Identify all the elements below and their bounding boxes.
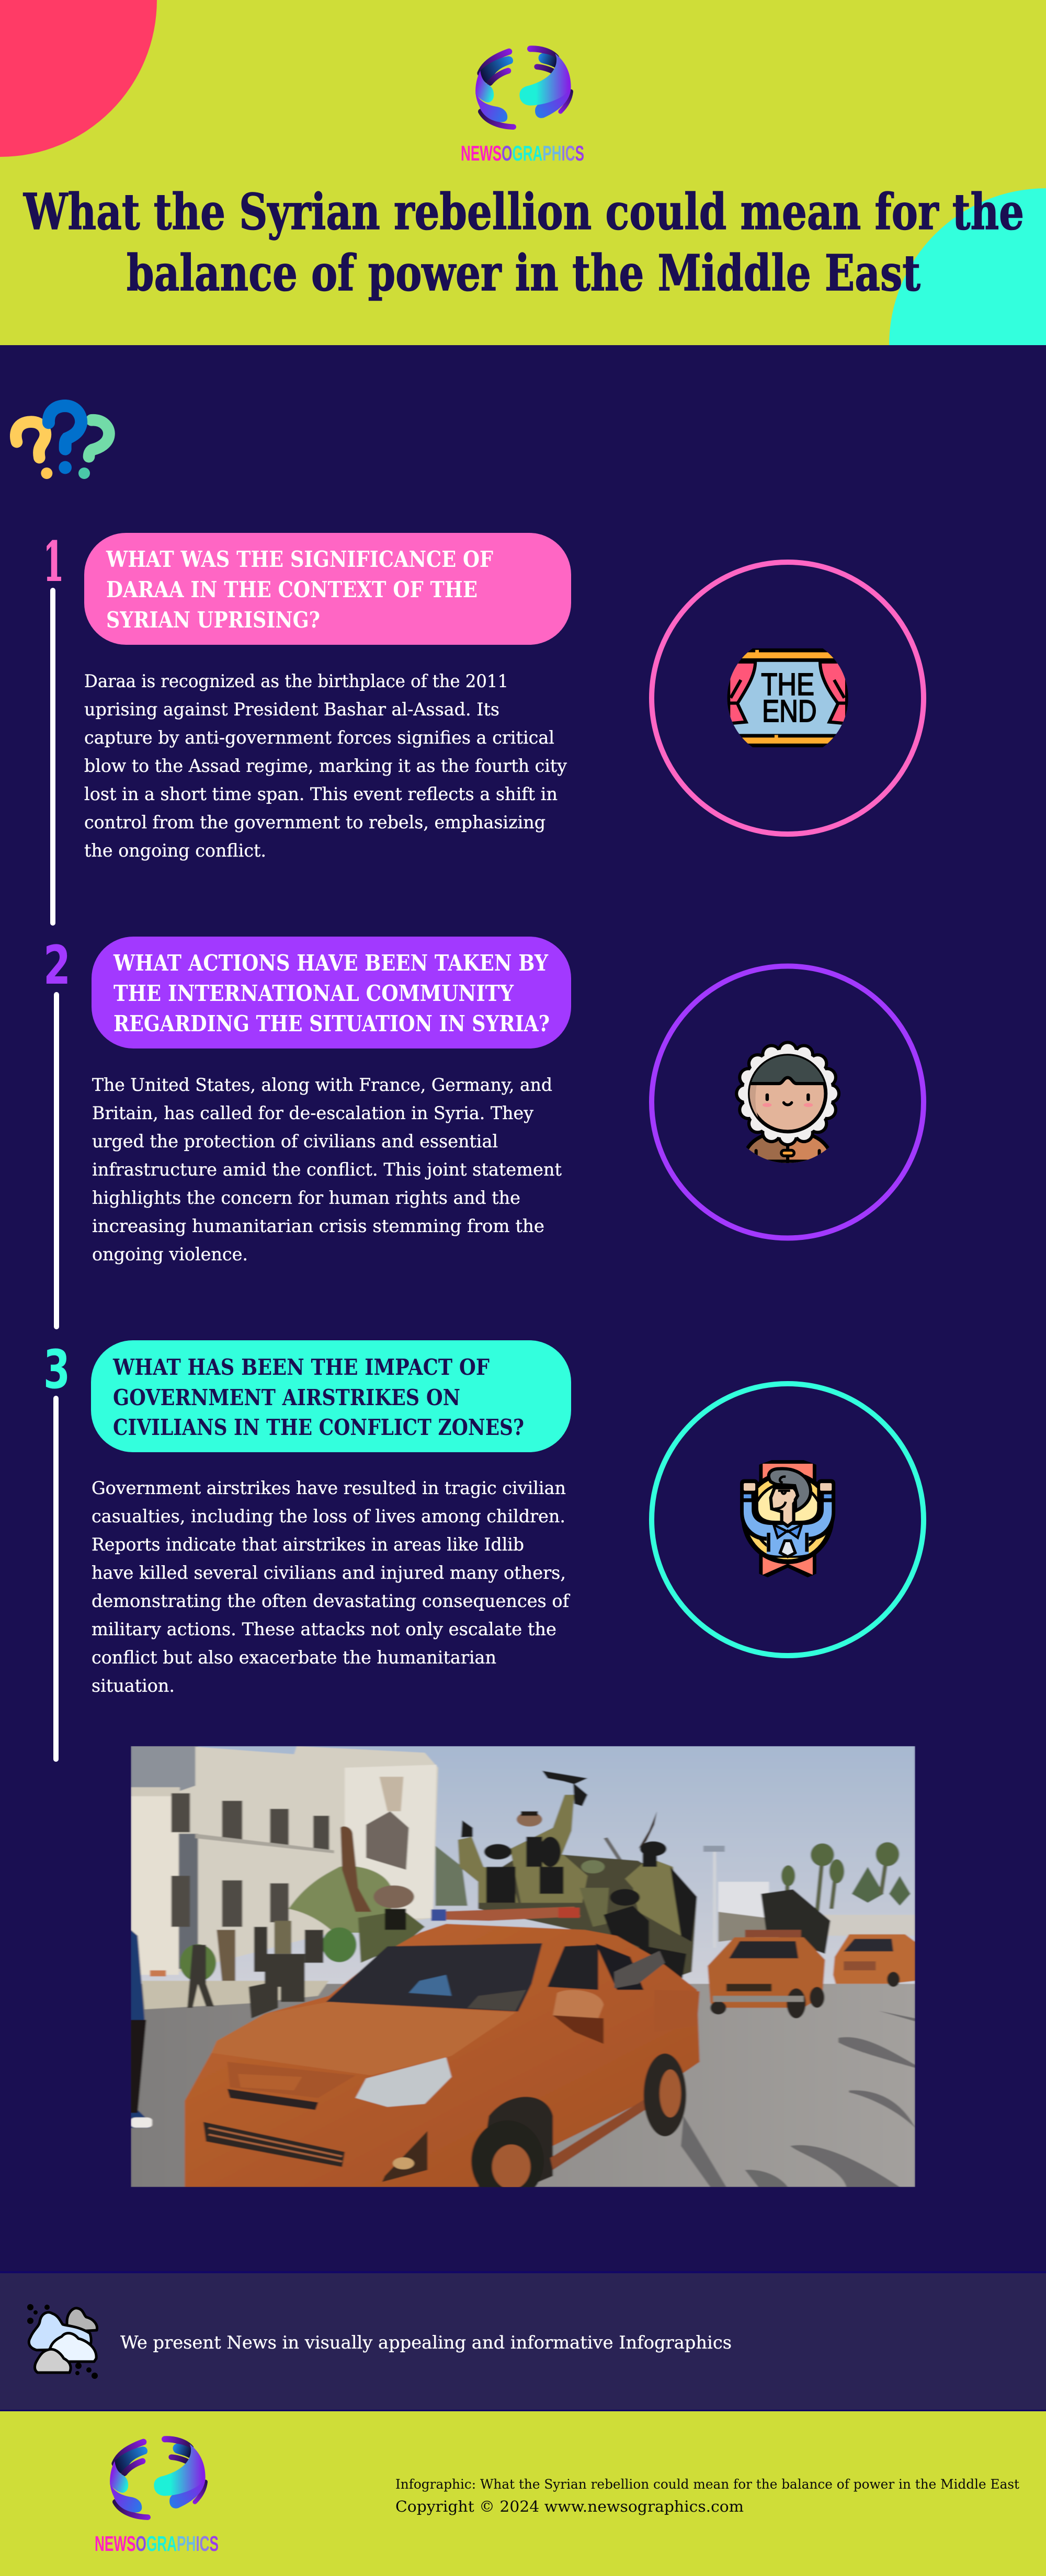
- question pill 3: [91, 1340, 571, 1452]
- answer text 1: [84, 671, 567, 861]
- question pill 3: CIVILIANS IN THE CONFLICT ZONES?: [113, 1415, 524, 1440]
- answer text 1: control from the government to rebels, emphasizing: [84, 812, 545, 833]
- light bar: [431, 1907, 581, 1921]
- section 3: [43, 1339, 924, 1762]
- timeline line 2: [54, 992, 59, 1329]
- icon ring 1: [652, 562, 924, 834]
- logo: Newsographics header: [461, 49, 584, 165]
- header band: [0, 0, 1046, 345]
- answer text 3: conflict but also exacerbate the humanitarian: [92, 1647, 496, 1668]
- answer text 3: Government airstrikes have resulted in tragic civilian: [92, 1478, 566, 1498]
- photo: rebel fighters on rust-coloured pickup trucks: [131, 1746, 915, 2202]
- answer text 3: have killed several civilians and injured many others,: [92, 1563, 566, 1583]
- answer text 2: increasing humanitarian crisis stemming from the: [92, 1216, 544, 1236]
- question pill 1: WHAT WAS THE SIGNIFICANCE OF: [106, 546, 493, 572]
- main pickup truck: [185, 1924, 700, 2202]
- answer text 1: lost in a short time span. This event reflects a shift in: [84, 784, 558, 804]
- building: [131, 1746, 199, 1791]
- footer logo: [95, 2439, 219, 2556]
- answer text 3: Reports indicate that airstrikes in areas like Idlib: [92, 1534, 524, 1555]
- answer text 1: blow to the Assad regime, marking it as the fourth city: [84, 756, 567, 776]
- number 3: 3: [43, 1339, 70, 1401]
- answer text 2: ongoing violence.: [92, 1244, 248, 1264]
- section 2: [43, 934, 924, 1329]
- icon: man with ribbon badge: [740, 1460, 835, 1577]
- number 2: 2: [43, 934, 71, 997]
- icon: person in fur hood: [735, 1041, 840, 1167]
- tagline text: We present News in visually appealing and informative Infographics: [120, 2332, 732, 2353]
- icon: question marks: [16, 406, 109, 479]
- palm and hedges: [289, 1866, 393, 1933]
- icon: clouds: [27, 2304, 98, 2379]
- decorative cyan quarter circle: [889, 188, 1046, 345]
- answer text 3: [92, 1478, 571, 1696]
- answer text 2: [92, 1075, 562, 1264]
- bystanders: [187, 1921, 323, 2019]
- answer text 3: casualties, including the loss of lives among children.: [92, 1506, 565, 1526]
- answer text 2: urged the protection of civilians and essential: [92, 1131, 498, 1152]
- answer text 1: the ongoing conflict.: [84, 840, 266, 861]
- answer text 3: situation.: [92, 1675, 175, 1696]
- question pill 2: WHAT ACTIONS HAVE BEEN TAKEN BY: [113, 950, 549, 976]
- icon: the end curtain: [724, 646, 852, 750]
- footer tagline band: [0, 2271, 1046, 2411]
- decorative red quarter circle: [0, 0, 157, 157]
- icon ring 3: [652, 1384, 924, 1656]
- answer text 3: military actions. These attacks not only escalate the: [92, 1619, 556, 1639]
- answer text 3: demonstrating the often devastating consequences of: [92, 1591, 571, 1611]
- footer logo wordmark: NEWSOGRAPHICS: [95, 2532, 219, 2556]
- copyright line: Copyright © 2024 www.newsographics.com: [395, 2498, 744, 2515]
- question pill 3: WHAT HAS BEEN THE IMPACT OF: [112, 1354, 490, 1380]
- answer text 2: Britain, has called for de-escalation in Syria. They: [92, 1103, 533, 1123]
- answer text 1: Daraa is recognized as the birthplace of the 2011: [84, 671, 508, 691]
- logo mark: [475, 49, 571, 127]
- answer text 1: capture by anti-government forces signifies a critical: [84, 727, 554, 748]
- second pickup truck: [708, 1889, 831, 2019]
- road shadows and figure at edge: [681, 2011, 915, 2187]
- section 1: [43, 530, 924, 926]
- icon ring 2: [652, 966, 924, 1238]
- icon: the end curtain: END: [762, 693, 817, 728]
- footer band: [0, 2411, 1046, 2576]
- background trees and buildings: [718, 1882, 769, 1918]
- timeline line 3: [53, 1396, 59, 1762]
- footer logo mark: [110, 2439, 206, 2517]
- question pill 1: [84, 533, 571, 645]
- answer text 2: The United States, along with France, Germany, and: [92, 1075, 552, 1095]
- question pill 2: REGARDING THE SITUATION IN SYRIA?: [113, 1011, 550, 1036]
- title: [23, 183, 1024, 302]
- question pill 2: [92, 937, 571, 1048]
- number 1: 1: [43, 530, 64, 594]
- icon: the end curtain: THE: [761, 667, 814, 702]
- road and pavement: [131, 1984, 915, 2187]
- fighters on the truck: [478, 1852, 697, 1987]
- infographic caption: Infographic: What the Syrian rebellion could mean for the balance of power in the Middle East: [395, 2477, 1019, 2492]
- question pill 1: DARAA IN THE CONTEXT OF THE: [106, 577, 477, 602]
- question pill 2: THE INTERNATIONAL COMMUNITY: [113, 981, 514, 1006]
- timeline line 1: [50, 588, 55, 926]
- question pill 3: GOVERNMENT AIRSTRIKES ON: [113, 1385, 460, 1410]
- third pickup truck: [833, 1934, 915, 1987]
- answer text 1: uprising against President Bashar al-Assad. Its: [84, 699, 499, 720]
- answer text 2: highlights the concern for human rights and the: [92, 1188, 520, 1208]
- question pill 1: SYRIAN UPRISING?: [106, 607, 320, 633]
- logo wordmark: NEWSOGRAPHICS: [461, 141, 584, 165]
- man waving on the left: [340, 1826, 371, 1912]
- answer text 2: infrastructure amid the conflict. This joint statement: [92, 1159, 562, 1180]
